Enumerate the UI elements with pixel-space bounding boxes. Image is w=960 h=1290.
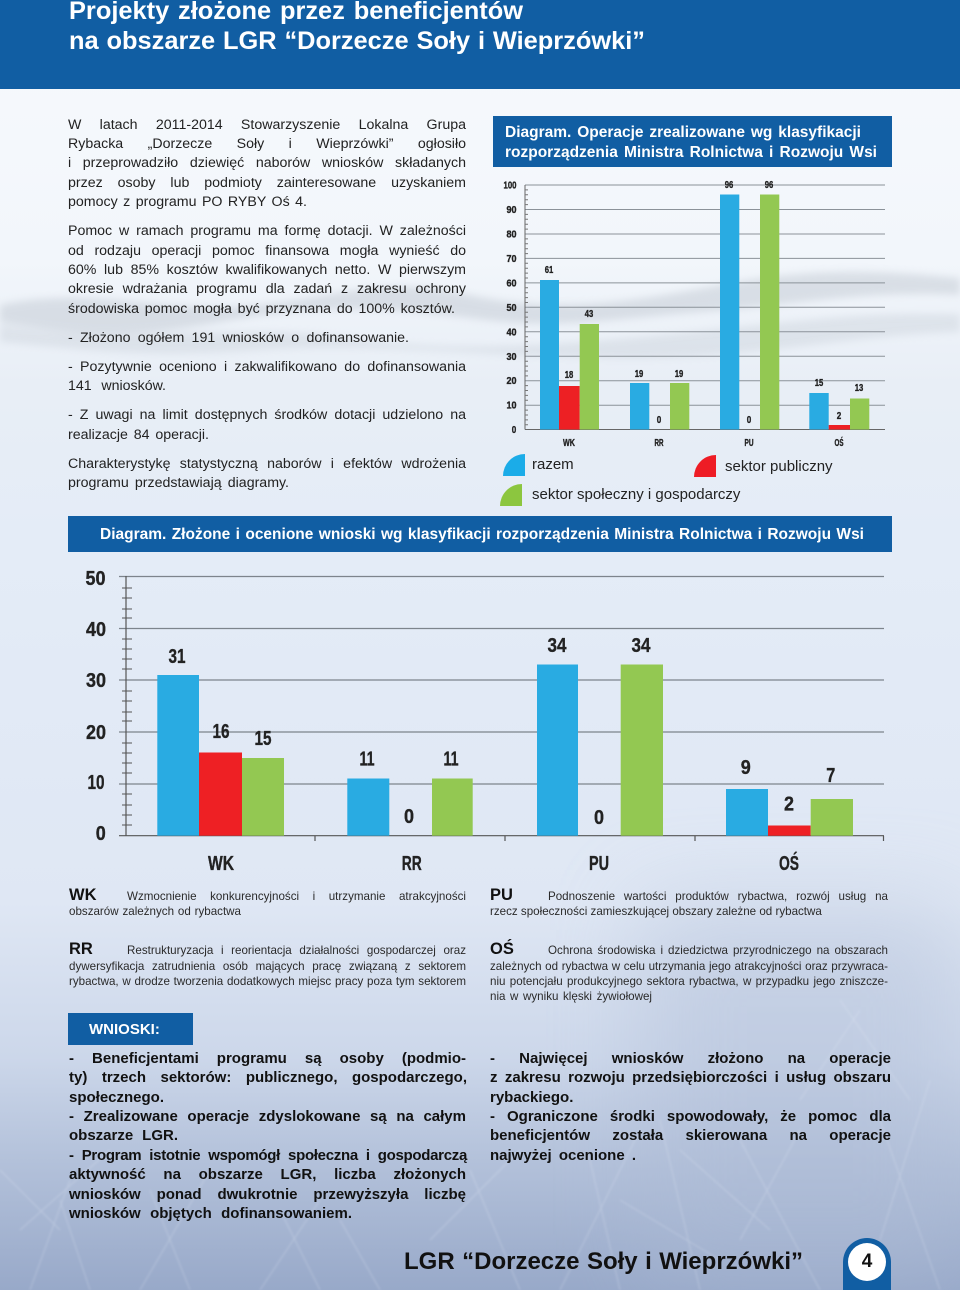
legend: sektor społeczny i gospodarczy [500,484,522,506]
conclusions: left column: ty) trzech sektorów: publicznego, gospodarczego, [69,1069,467,1086]
bar chart: operations by classification: RR [654,438,664,449]
conclusions: left column: aktywność na obszarze LGR, liczba złożonych [69,1166,466,1183]
intro text block: 141 wniosków. [68,378,166,394]
bar chart: submitted and evaluated applications: 0 [96,823,106,845]
definitions: OS: zależnych od rybactwa w celu utrzymania jego atrakcyjności oraz przywraca- [490,960,888,973]
heading: applications diagram [68,516,892,552]
bar chart: submitted and evaluated applications: 0 [404,806,414,828]
intro text block: Charakterystykę statystyczną naborów i efektów wdrożenia [68,456,466,472]
bar chart: operations by classification: 10 [506,400,517,412]
intro text block: Rybacka „Dorzecze Soły i Wieprzówki” ogłosiło [68,136,466,152]
bar chart: operations by classification: 80 [506,230,517,240]
conclusions: left column: wniosków ponad dwukrotnie przewyższyła liczbę [69,1186,466,1203]
bar chart: operations by classification: WK [563,438,576,449]
bar chart: operations by classification: 0 [747,415,752,426]
page number tab [843,1238,891,1290]
conclusions: right column: z zakresu rozwoju przedsiębiorczości i usług obszaru [490,1069,891,1086]
heading: applications diagram: Diagram. Złożone i ocenione wnioski wg klasyfikacji rozporządzenia Ministra Rolnictwa i Rozwoju Wsi [100,526,864,543]
definitions: OS: nia w wyniku klęski żywiołowej [490,990,652,1003]
conclusions: left column: wniosków objętych dofinansowaniem. [69,1205,352,1222]
heading: operations diagram: Diagram. Operacje zrealizowane wg klasyfikacji [505,124,861,141]
bar chart: operations by classification: 43 [585,309,594,320]
bar chart: submitted and evaluated applications: 16 [212,721,230,743]
bar chart: operations by classification: 40 [506,328,517,338]
bar chart: submitted and evaluated applications: 0 [594,807,604,829]
bar chart: submitted and evaluated applications: WK [208,853,234,875]
heading: conclusions [68,1013,193,1045]
page number [848,1243,886,1281]
legend: sektor publiczny [725,458,833,475]
header band [0,0,960,89]
legend: sektor społeczny i gospodarczy [532,486,740,503]
intro text block [68,117,466,491]
bar chart: submitted and evaluated applications: OŚ [779,851,799,875]
intro text block: - Pozytywnie oceniono i zakwalifikowano do dofinansowania [68,359,466,375]
bar chart: operations by classification: 60 [506,278,517,290]
conclusions: left column [69,1050,468,1222]
intro text block: przez osoby lub podmioty zainteresowane uzyskaniem [68,175,466,191]
legend: sektor publiczny [694,455,716,477]
definitions: PU: Podnoszenie wartości produktów rybactwa, rozwój usług na [548,890,888,903]
bar chart: submitted and evaluated applications: 30 [86,670,106,692]
page title: na obszarze LGR “Dorzecze Soły i Wieprzówki” [69,27,645,55]
definitions: OS: Ochrona środowiska i dziedzictwa przyrodniczego na obszarach [548,944,888,957]
conclusions: left column: - Zrealizowane operacje zdyslokowane są na całym [69,1108,466,1125]
bar chart: operations by classification: 50 [506,303,517,314]
bar chart: operations by classification: PU [744,438,754,449]
conclusions: right column: beneficjentów została skierowana na operacje [490,1127,891,1144]
definitions: PU [490,886,888,918]
bar chart: operations by classification: 13 [855,383,864,394]
intro text block: Pomoc w ramach programu ma formę dotacji. W zależności [68,223,466,239]
conclusions: right column [490,1050,892,1164]
bar chart: operations by classification: 61 [545,265,554,276]
bar chart: submitted and evaluated applications: 34 [548,635,567,657]
definitions: WK: Wzmocnienie konkurencyjności i utrzymanie atrakcyjności [127,890,466,903]
bar chart: submitted and evaluated applications: 34 [632,635,651,657]
bar chart: operations by classification [504,180,885,449]
page title [69,0,645,55]
footer title: LGR “Dorzecze Soły i Wieprzówki” [404,1248,803,1275]
intro text block: realizacje 84 operacji. [68,427,209,443]
heading: operations diagram [493,116,892,167]
page number: 4 [862,1251,872,1272]
bar chart: operations by classification: 90 [506,205,517,216]
bar chart: operations by classification: 70 [506,254,517,265]
definitions: WK [69,886,466,918]
intro text block: 60% lub 85% kosztów kwalifikowanych netto. W pierwszym [68,262,466,278]
legend: razem [503,454,525,476]
bar chart: operations by classification: 96 [725,180,734,191]
conclusions: right column: - Najwięcej wniosków złożono na operacje [490,1050,891,1067]
bar chart: operations by classification: 15 [815,378,824,389]
definitions: RR [69,940,466,988]
definitions: PU: PU [490,886,513,904]
bar chart: operations by classification: OŚ [834,436,844,449]
conclusions: left column: - Program istotnie wspomógł społeczna i gospodarczą [69,1147,467,1164]
bar chart: submitted and evaluated applications: 31 [168,646,186,668]
conclusions: left column: - Beneficjentami programu są osoby (podmio- [69,1050,466,1067]
definitions: WK: WK [69,886,96,904]
bar chart: submitted and evaluated applications [86,568,884,875]
bar chart: operations by classification: 18 [565,370,574,381]
bar chart: submitted and evaluated applications: 7 [826,765,835,787]
conclusions: left column: społecznego. [69,1089,164,1106]
bar chart: operations by classification: 0 [657,415,662,426]
bar chart: operations by classification: 100 [504,180,517,192]
bar chart: operations by classification: 30 [506,352,517,363]
intro text block: - Złożono ogółem 191 wniosków o dofinansowanie. [68,330,409,346]
heading: conclusions: WNIOSKI: [89,1021,160,1038]
definitions: WK: obszarów zależnych od rybactwa [69,905,241,918]
intro text block: środowiska pomoc mogła być przyznana do 100% kosztów. [68,301,455,317]
conclusions: right column: - Ograniczone środki spowodowały, że pomoc dla [490,1108,891,1125]
definitions: RR: RR [69,940,93,958]
bar chart: operations by classification: 96 [765,180,774,191]
bar chart: operations by classification: 19 [675,369,684,380]
bar chart: submitted and evaluated applications: 15 [254,728,272,750]
bar chart: submitted and evaluated applications: 11 [360,749,374,771]
legend: razem [532,456,574,473]
definitions: RR: dywersyfikacja zatrudnienia osób mających pracę związaną z sektorem [69,960,466,973]
bar chart: operations by classification: 0 [512,425,517,436]
intro text block: pomocy z programu PO RYBY Oś 4. [68,194,307,210]
bar chart: submitted and evaluated applications: 2 [784,794,794,816]
bar chart: operations by classification: 20 [506,376,517,387]
intro text block: - Z uwagi na limit dostępnych środków dotacji udzielono na [68,407,466,423]
bar chart: submitted and evaluated applications: 11 [444,749,458,771]
conclusions: right column: rybackiego. [490,1089,573,1106]
definitions: OS: OŚ [490,940,514,958]
conclusions: left column: obszarze LGR. [69,1127,178,1144]
bar chart: operations by classification: 2 [837,411,842,422]
definitions: PU: rzecz społeczności zamieszkującej obszary zależne od rybactwa [490,905,822,918]
bar chart: submitted and evaluated applications: 10 [88,772,104,794]
intro text block: i przeprowadziło dziewięć naborów wniosków składanych [68,155,466,171]
intro text block: W latach 2011-2014 Stowarzyszenie Lokalna Grupa [68,117,466,133]
definitions: OS [490,939,888,1003]
conclusions: right column: najwyżej ocenione . [490,1147,636,1164]
bar chart: submitted and evaluated applications: 9 [741,757,751,779]
bar chart: submitted and evaluated applications: 50 [86,568,106,590]
intro text block: okresie wdrażania programu dla zadań z zakresu ochrony [68,281,466,297]
bar chart: submitted and evaluated applications: PU [589,853,609,875]
definitions: RR: rybactwa, w drodze tworzenia dodatkowych miejsc pracy poza tym sektorem [69,975,466,988]
intro text block: od rodzaju operacji pomoc finansowa mogła wynieść do [68,243,466,259]
intro text block: programu przedstawiają diagramy. [68,475,289,491]
heading: operations diagram: rozporządzenia Ministra Rolnictwa i Rozwoju Wsi [505,144,877,161]
bar chart: submitted and evaluated applications: RR [402,853,422,875]
bar chart: submitted and evaluated applications: 20 [86,722,106,744]
definitions: OS: niu potencjału produkcyjnego sektora rybactwa, w przypadku jego zniszcze- [490,975,888,988]
definitions: RR: Restrukturyzacja i reorientacja działalności gospodarczej oraz [127,944,466,957]
bar chart: operations by classification: 19 [635,369,644,380]
bar chart: submitted and evaluated applications: 40 [86,619,106,641]
legend [500,454,833,506]
